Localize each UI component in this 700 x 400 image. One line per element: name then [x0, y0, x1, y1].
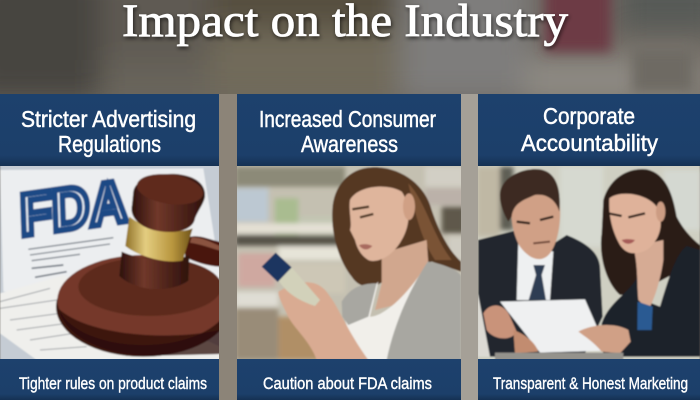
gavel handle: [185, 236, 220, 267]
caption bar: caution about FDA claims: [237, 359, 461, 400]
gavel head top: [132, 174, 205, 232]
photo: woman reading a product label: [235, 160, 465, 360]
woman: hair: [601, 169, 700, 295]
header bar: increased consumer awareness: [237, 94, 461, 166]
header bar: increased consumer awareness: Increased Consumer: [259, 106, 436, 132]
header bar: stricter advertising regulations: Regulations: [58, 131, 161, 157]
woman: neck and chest: [633, 240, 663, 310]
panel: increased consumer awareness: [235, 94, 465, 400]
man: suit: [478, 231, 603, 357]
photo: FDA document and gavel: [0, 160, 231, 360]
hands: [483, 306, 517, 338]
gold band: [125, 217, 193, 262]
sound block: [55, 297, 219, 358]
laptop edge: [478, 298, 490, 356]
table edge: [495, 353, 623, 360]
man: shirt and tie: [517, 240, 553, 300]
woman: face: [609, 194, 661, 253]
panel: stricter advertising regulations: [0, 94, 231, 400]
caption bar: transparent and honest marketing: [478, 359, 700, 400]
document: [500, 299, 607, 353]
header bar: corporate accountability: Corporate: [543, 103, 635, 129]
cardigan: [342, 262, 461, 360]
panel: corporate accountability: [470, 94, 700, 400]
gavel head lower: [119, 252, 189, 289]
FDA logo: FDA: [19, 167, 128, 249]
neck: [375, 240, 428, 310]
header bar: stricter advertising regulations: [0, 94, 219, 166]
white top: [345, 276, 418, 359]
hair: [332, 167, 461, 287]
header bar: increased consumer awareness: Awareness: [301, 131, 398, 157]
caption bar: caution about FDA claims: Caution about FDA claims: [263, 374, 432, 393]
header bar: corporate accountability: [478, 94, 700, 166]
face: [350, 187, 409, 261]
man: face: [511, 190, 560, 259]
photo: two professionals reviewing a document: [470, 160, 700, 360]
caption bar: tighter rules: [0, 359, 219, 400]
header bar: stricter advertising regulations: Stricter Advertising: [21, 106, 196, 132]
hands: [278, 282, 368, 360]
caption bar: tighter rules: Tighter rules on product claims: [19, 374, 207, 393]
header bar: corporate accountability: Accountability: [521, 130, 658, 156]
woman: blazer: [602, 246, 700, 357]
product bottle: [278, 267, 320, 306]
